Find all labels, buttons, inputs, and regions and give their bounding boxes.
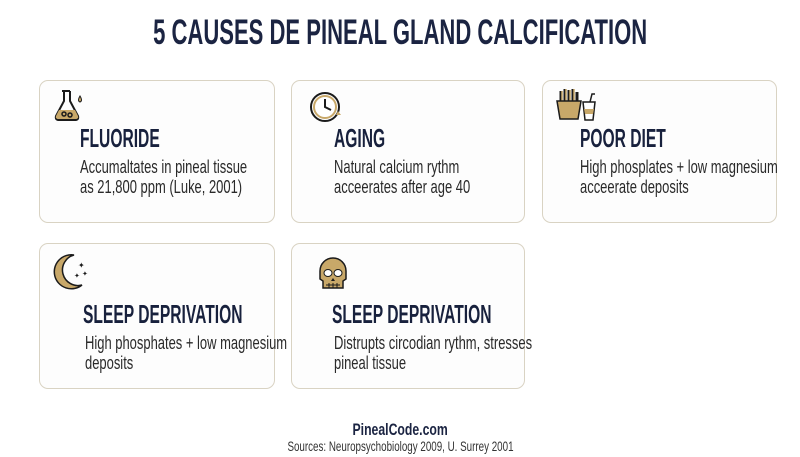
icon: fries and drink: [556, 89, 596, 121]
text: Natural calcium rythm: [334, 157, 459, 177]
heading: FLUORIDE: [80, 123, 160, 153]
footer: site: PinealCode.com: [352, 420, 448, 439]
heading: AGING: [334, 123, 385, 153]
text: as 21,800 ppm (Luke, 2001): [80, 177, 242, 197]
text: High phosplates + low magnesium: [580, 157, 778, 177]
text: acceerates after age 40: [334, 177, 470, 197]
text: [334, 157, 470, 197]
panel: sleep deprivation: [39, 243, 275, 389]
text: [580, 157, 778, 197]
panel: fluoride: [39, 80, 275, 223]
footer: sources: Sources: Neuropsychobiology 2009, U. Surrey 2001: [287, 438, 513, 454]
panel: sleep deprivation 2: [291, 243, 525, 389]
text: Distrupts circodian rythm, stresses: [334, 333, 532, 353]
text: [80, 157, 247, 197]
icon: moon: ✦: [82, 270, 88, 278]
text: pineal tissue: [334, 353, 406, 373]
text: Accumaltates in pineal tissue: [80, 157, 247, 177]
panel: aging: [291, 80, 525, 223]
icon: flask: [54, 90, 82, 121]
heading: POOR DIET: [580, 123, 666, 153]
text: [85, 333, 287, 373]
text: High phosphates + low magnesium: [85, 333, 287, 353]
icon: clock: [310, 92, 341, 122]
icon: moon: [54, 254, 88, 290]
heading: SLEEP DEPRIVATION: [83, 299, 242, 329]
icon: skull: [319, 257, 347, 289]
text: acceerate deposits: [580, 177, 689, 197]
text: [334, 333, 532, 373]
text: deposits: [85, 353, 133, 373]
panel: poor diet: [542, 80, 777, 223]
title: 5 CAUSES DE PINEAL GLAND CALCIFICATION: [153, 13, 647, 52]
icon: moon: ✦: [78, 261, 85, 270]
icon: moon: ✦: [74, 272, 80, 280]
heading: SLEEP DEPRIVATION: [332, 299, 491, 329]
